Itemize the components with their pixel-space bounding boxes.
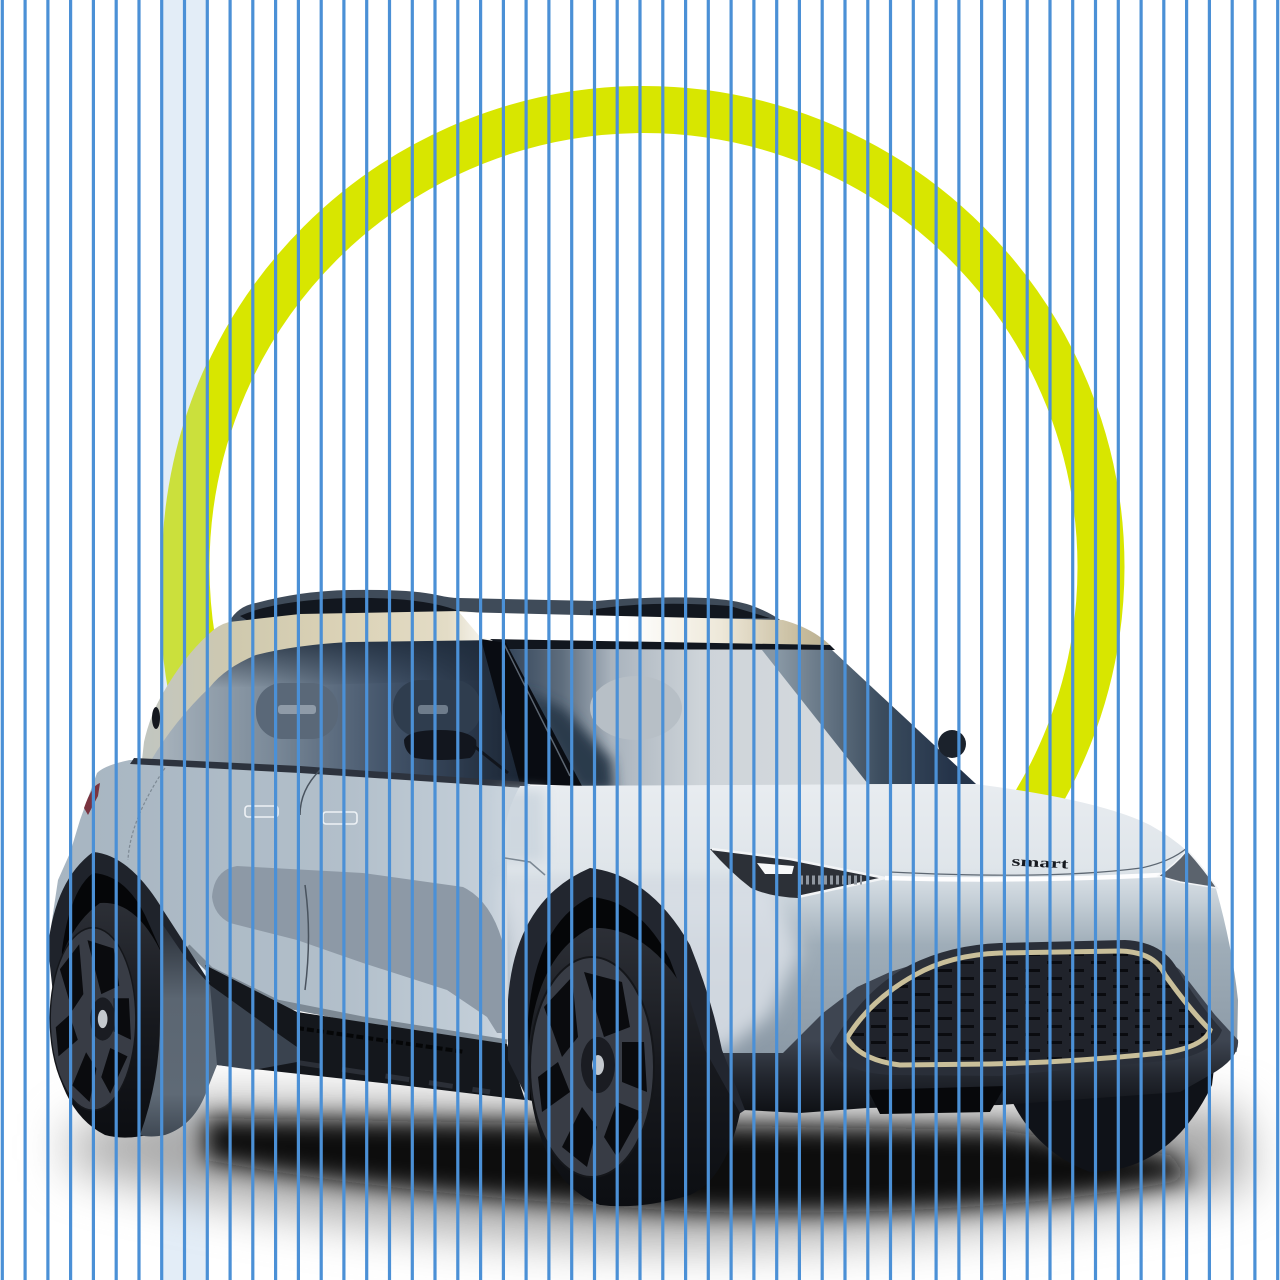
side body [48, 760, 540, 1040]
rear wheel arch [48, 852, 215, 1133]
seats in side window [256, 680, 481, 739]
front fender light area [505, 885, 800, 1050]
windshield dark left [525, 690, 615, 792]
front wheel well [528, 897, 700, 1120]
seat in windshield [590, 676, 682, 740]
rear door seam [128, 768, 165, 860]
sill lower vents [255, 1056, 490, 1092]
headlight left [710, 849, 885, 898]
door lower inset panel [212, 866, 503, 1033]
hood to door blend [496, 790, 545, 862]
door edge line [505, 858, 545, 875]
lower bumper vent [868, 1086, 1005, 1114]
rear badge [152, 707, 160, 729]
rear rim [50, 928, 136, 1110]
far front wheel [1005, 1060, 1215, 1172]
sill vents [297, 1028, 465, 1052]
grille surround [830, 940, 1222, 1076]
front bumper [703, 945, 1238, 1113]
windshield right tint [762, 650, 976, 784]
ground shadow [70, 1100, 1250, 1245]
pale vertical band [162, 0, 207, 1280]
door handle rear [245, 806, 278, 817]
front tire [528, 928, 740, 1206]
roof band front [459, 612, 830, 645]
side mirror right [938, 730, 966, 758]
lime ring [186, 110, 1101, 1024]
rear wheel well [60, 873, 165, 1080]
hood edge line [890, 848, 1187, 875]
brand badge: smart [1011, 855, 1069, 873]
sill [205, 965, 525, 1100]
front rim [530, 957, 654, 1177]
a-pillar highlight [503, 642, 570, 776]
door handle front [323, 812, 357, 824]
grille [847, 951, 1210, 1065]
front wheel arch [508, 868, 745, 1140]
hood and front [504, 784, 1238, 1060]
tail light [84, 783, 100, 815]
rear quarter panel [187, 965, 297, 1070]
door seam [300, 770, 320, 990]
lower body strip [187, 947, 507, 1043]
rear mud flap [140, 925, 217, 1136]
car [48, 590, 1238, 1206]
rear tire [50, 903, 166, 1138]
a-pillar [481, 639, 582, 786]
ring section over pale band [160, 363, 207, 690]
headlight right [1158, 850, 1217, 888]
windshield header [490, 639, 835, 650]
side window [142, 638, 525, 783]
roof band side [142, 611, 500, 762]
windshield [505, 649, 976, 786]
daytime running light [885, 875, 1160, 879]
side mirror left [404, 730, 508, 773]
roof rails [229, 590, 783, 624]
window sill [130, 758, 525, 788]
